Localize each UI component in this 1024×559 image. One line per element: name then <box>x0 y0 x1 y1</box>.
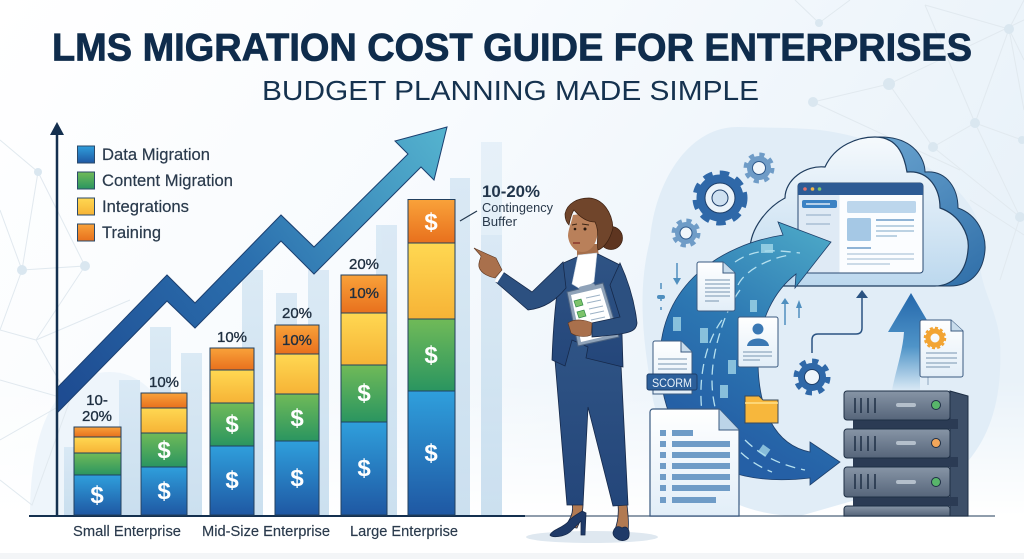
server unit 1 <box>844 391 950 420</box>
percent labels: 20% <box>82 408 112 425</box>
bar: mid-size enterprise 1 <box>210 348 254 515</box>
trend arrow <box>57 127 447 413</box>
LMS browser window <box>798 183 923 273</box>
dollar signs on bars: $ <box>424 342 438 369</box>
document <box>697 262 735 311</box>
contingency buffer callout: 10-20% <box>482 183 540 201</box>
icon: upper small gear <box>746 155 772 181</box>
server back <box>950 391 968 516</box>
SCORM package <box>647 341 697 394</box>
contingency buffer callout <box>460 183 553 229</box>
dollar signs on bars <box>90 209 438 509</box>
bar: small enterprise 2 <box>141 393 187 515</box>
pointing hand <box>474 248 502 278</box>
connector arrow from gear to cloud <box>812 290 868 353</box>
businesswoman presenter <box>474 198 658 543</box>
curved migration arrow <box>660 222 840 485</box>
percent labels <box>82 256 379 425</box>
user profile card <box>738 317 778 367</box>
clipboard <box>567 283 619 346</box>
server unit 3 <box>844 467 950 497</box>
percent labels: 10% <box>217 329 247 346</box>
legend: training <box>78 223 161 242</box>
floor shadow <box>526 531 658 543</box>
legend <box>78 145 233 242</box>
light blue blob behind migration illustration <box>642 127 1000 516</box>
document with gear <box>920 320 963 385</box>
legend: training: Training <box>102 223 161 242</box>
migration flow illustration <box>647 137 985 516</box>
dollar signs on bars: $ <box>157 478 171 505</box>
chart axes <box>29 122 995 516</box>
percent labels: 10% <box>282 332 312 349</box>
legend: data migration: Data Migration <box>102 145 210 164</box>
percent labels: 20% <box>349 256 379 273</box>
x-axis labels <box>73 524 458 540</box>
percent labels: 20% <box>282 305 312 322</box>
stacked bar chart <box>74 200 455 515</box>
bar: small enterprise 1 <box>74 427 121 515</box>
server unit 2 <box>844 429 950 458</box>
legs and shoes <box>550 335 629 541</box>
percent labels: 10% <box>349 285 379 302</box>
background decorative bars <box>64 142 502 516</box>
icon: left small gear <box>674 221 698 245</box>
contingency buffer callout: Contingency <box>482 200 553 215</box>
percent labels: 10- <box>86 392 108 409</box>
x-axis labels: Large Enterprise <box>350 524 458 540</box>
title: LMS MIGRATION COST GUIDE FOR ENTERPRISES <box>52 26 972 70</box>
dollar signs on bars: $ <box>357 455 371 482</box>
dollar signs on bars: $ <box>290 465 304 492</box>
dollar signs on bars: $ <box>157 437 171 464</box>
dollar signs on bars: $ <box>90 482 104 509</box>
holding arm <box>592 263 637 337</box>
legend: integrations: Integrations <box>102 197 189 216</box>
dollar signs on bars: $ <box>225 411 239 438</box>
percent labels: 10% <box>149 374 179 391</box>
shirt collar <box>572 253 597 290</box>
dollar signs on bars: $ <box>357 380 371 407</box>
dollar signs on bars: $ <box>424 440 438 467</box>
raised pointing arm <box>496 262 566 310</box>
large document list <box>650 409 739 516</box>
upward arrow from server to cloud <box>888 293 934 390</box>
subtitle: BUDGET PLANNING MADE SIMPLE <box>262 75 759 106</box>
bar: large enterprise 1 <box>341 275 387 515</box>
server unit 4 <box>844 506 950 516</box>
bar: mid-size enterprise 2 <box>275 325 319 515</box>
dollar signs on bars: $ <box>424 209 438 236</box>
head <box>565 198 622 252</box>
contingency buffer callout: Buffer <box>482 214 518 229</box>
neck <box>577 244 600 262</box>
legend: content migration: Content Migration <box>102 171 233 190</box>
server rack <box>844 391 968 516</box>
shirt cuff <box>496 271 503 282</box>
SCORM package: SCORM <box>652 376 692 390</box>
small arrows around flow <box>657 263 802 325</box>
folder <box>745 396 778 423</box>
dollar signs on bars: $ <box>225 467 239 494</box>
jacket <box>552 254 623 367</box>
holding hand <box>568 320 592 336</box>
cloud <box>750 137 985 286</box>
x-axis labels: Small Enterprise <box>73 524 181 540</box>
icon: large gear <box>696 174 744 222</box>
dollar signs on bars: $ <box>290 405 304 432</box>
bar: large enterprise 2 <box>408 200 455 515</box>
x-axis labels: Mid-Size Enterprise <box>202 524 330 540</box>
icon: lower gear <box>796 362 828 392</box>
